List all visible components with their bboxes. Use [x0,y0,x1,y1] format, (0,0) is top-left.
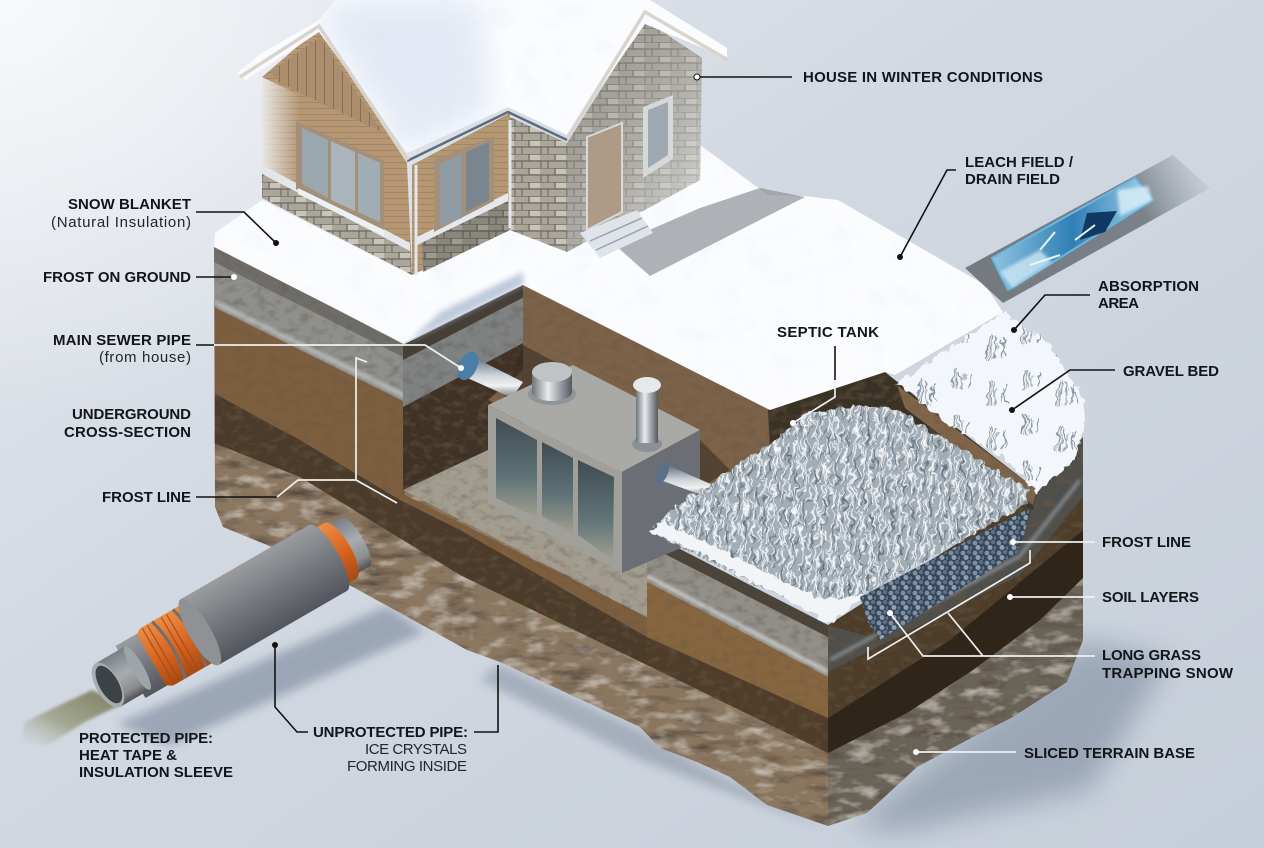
label: frost line right: FROST LINE [1102,534,1191,551]
label: frost line left: FROST LINE [102,489,191,506]
absorption area: snowy grass [897,312,1085,493]
label: long grass: TRAPPING SNOW [1102,665,1234,682]
main sewer pipe [454,349,523,398]
icy driveway [615,188,805,276]
inner wrap [116,626,180,698]
long grass field [650,405,1030,620]
ground shadows [117,606,1170,832]
label: soil layers: SOIL LAYERS [1102,589,1199,606]
outflow water [20,690,122,745]
label: long grass [1102,647,1234,682]
snow at grass edge [647,522,865,624]
label: house: HOUSE IN WINTER CONDITIONS [803,69,1043,86]
label: absorption area [1098,278,1199,312]
label: main sewer pipe: (from house) [99,349,191,366]
label: long grass: LONG GRASS [1102,647,1201,664]
long grass line [887,610,1095,656]
gravel bed [860,508,1030,640]
access lid [528,362,576,405]
bedrock layer [205,430,835,830]
frost band [214,245,405,402]
heat tape wraps [135,602,218,689]
left frost line connector [196,358,397,503]
terrain block: front face [205,245,835,830]
labels [43,69,1234,781]
second pipe line [474,665,498,732]
middle wall [412,113,510,275]
label: unprotected pipe: ICE CRYSTALS [365,741,467,758]
label: gravel bed: GRAVEL BED [1123,363,1219,380]
steel pipe [85,643,155,713]
label: leach field: LEACH FIELD / [965,154,1074,171]
label: main sewer pipe [53,332,191,366]
unprotected pipe line [272,642,308,732]
big frosted window [296,121,384,236]
right window [643,95,673,178]
label: protected pipe: PROTECTED PIPE: [79,730,213,747]
stone inner wall [510,117,567,252]
septic tank [488,362,700,573]
label: protected pipe: HEAT TAPE & [79,747,177,764]
label: leach field [965,154,1074,188]
ice crystals [1000,186,1152,288]
gravel bed line [1009,370,1115,413]
label: snow blanket: (Natural Insulation) [51,214,191,231]
label: unprotected pipe: UNPROTECTED PIPE: [313,724,468,741]
right stone gable [567,20,702,252]
middle frosted window [434,136,494,232]
house [237,0,728,275]
label: underground cross-section: CROSS-SECTION [64,424,191,441]
roof trim [240,12,728,160]
right frost line [868,539,1095,659]
dark soil layer [214,393,647,665]
far heat tape [309,518,366,588]
label: absorption area: AREA [1098,295,1139,312]
glass section [992,178,1153,290]
far stub [316,514,377,581]
terrain base line [913,749,1016,755]
label: snow blanket [51,196,191,231]
label: unprotected pipe: FORMING INSIDE [347,758,467,775]
block soil layers [647,582,828,718]
septic tank line [790,346,835,426]
label: septic tank: SEPTIC TANK [777,324,879,341]
label: protected pipe: INSULATION SLEEVE [79,764,233,781]
label: underground cross-section: UNDERGROUND [72,406,191,423]
label: underground cross-section [64,406,191,441]
label: snow blanket: SNOW BLANKET [68,196,191,213]
label: frost on ground: FROST ON GROUND [43,269,191,286]
snow blanket line [196,212,279,246]
main sewer line [196,345,464,371]
tank chambers [496,418,614,560]
leach line [897,170,956,260]
downspouts [416,120,510,275]
outlet pipe [652,459,713,498]
absorption line [1011,295,1090,333]
soil layers line [1007,594,1095,600]
front steps [580,210,653,258]
label: sliced terrain base: SLICED TERRAIN BASE [1024,745,1195,762]
pit walls [403,285,1037,510]
soil behind grass [768,372,1037,510]
insulation sleeve [181,520,356,665]
vent stack [632,377,662,452]
snow shadow at notch [408,272,523,342]
pipe body along axis [79,505,382,724]
snow covered roof [237,0,727,153]
left gabled wall [262,28,412,275]
block frost band [647,554,828,677]
pit floor [403,450,647,617]
sleeve end face [171,594,228,670]
callout lines [196,74,1115,755]
snow blanket on ground [214,145,1003,410]
protected pipe [20,505,382,745]
label: protected pipe [79,730,233,781]
door [587,123,622,230]
label: leach field: DRAIN FIELD [965,171,1060,188]
gutter [407,112,567,161]
label: absorption area: ABSORPTION [1098,278,1199,295]
terrain block: right face [820,430,1090,830]
frost on ground line [196,274,237,280]
house line [694,74,792,80]
label: main sewer pipe: MAIN SEWER PIPE [53,332,191,349]
label: unprotected pipe [313,724,468,775]
leach pipe with ice crystals [965,155,1210,303]
brown soil layer [214,300,647,640]
